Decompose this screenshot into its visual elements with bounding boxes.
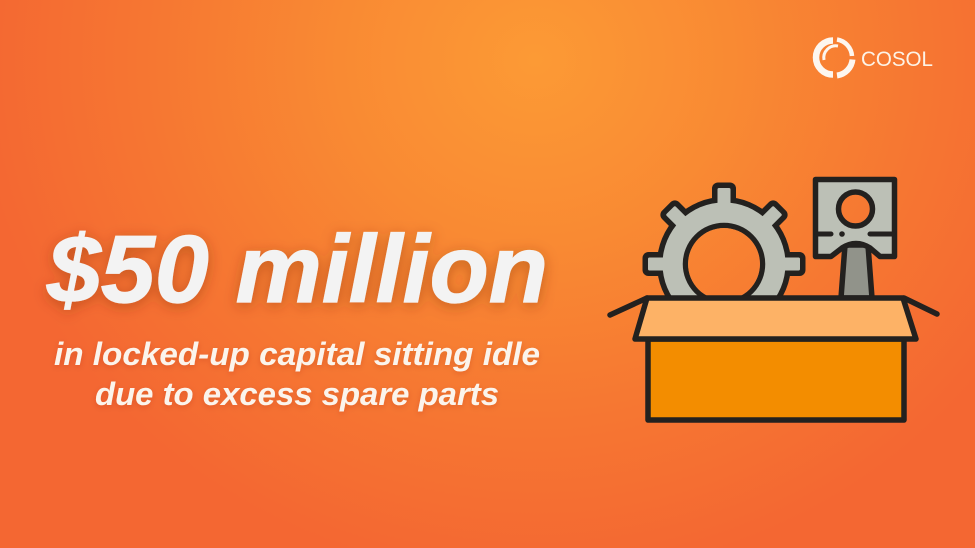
- icon: gear: [642, 182, 806, 296]
- piston head: [816, 180, 894, 256]
- subheading text: [54, 336, 540, 412]
- box lid: [635, 298, 916, 339]
- illustration: box with spare parts: [610, 180, 937, 420]
- box body: [648, 339, 904, 420]
- subheading text: in locked-up capital sitting idle: [54, 336, 540, 372]
- headline: $50 million: $50 million: [46, 216, 548, 323]
- box flaps: [610, 298, 937, 315]
- icon: cardboard box: [610, 298, 937, 420]
- piston rod: [841, 245, 872, 298]
- subheading text: due to excess spare parts: [95, 376, 499, 412]
- icon: logo ring: [816, 40, 852, 76]
- icon: piston: [816, 180, 894, 298]
- logo: COSOL: [816, 40, 933, 76]
- logo wordmark: COSOL: [861, 48, 933, 71]
